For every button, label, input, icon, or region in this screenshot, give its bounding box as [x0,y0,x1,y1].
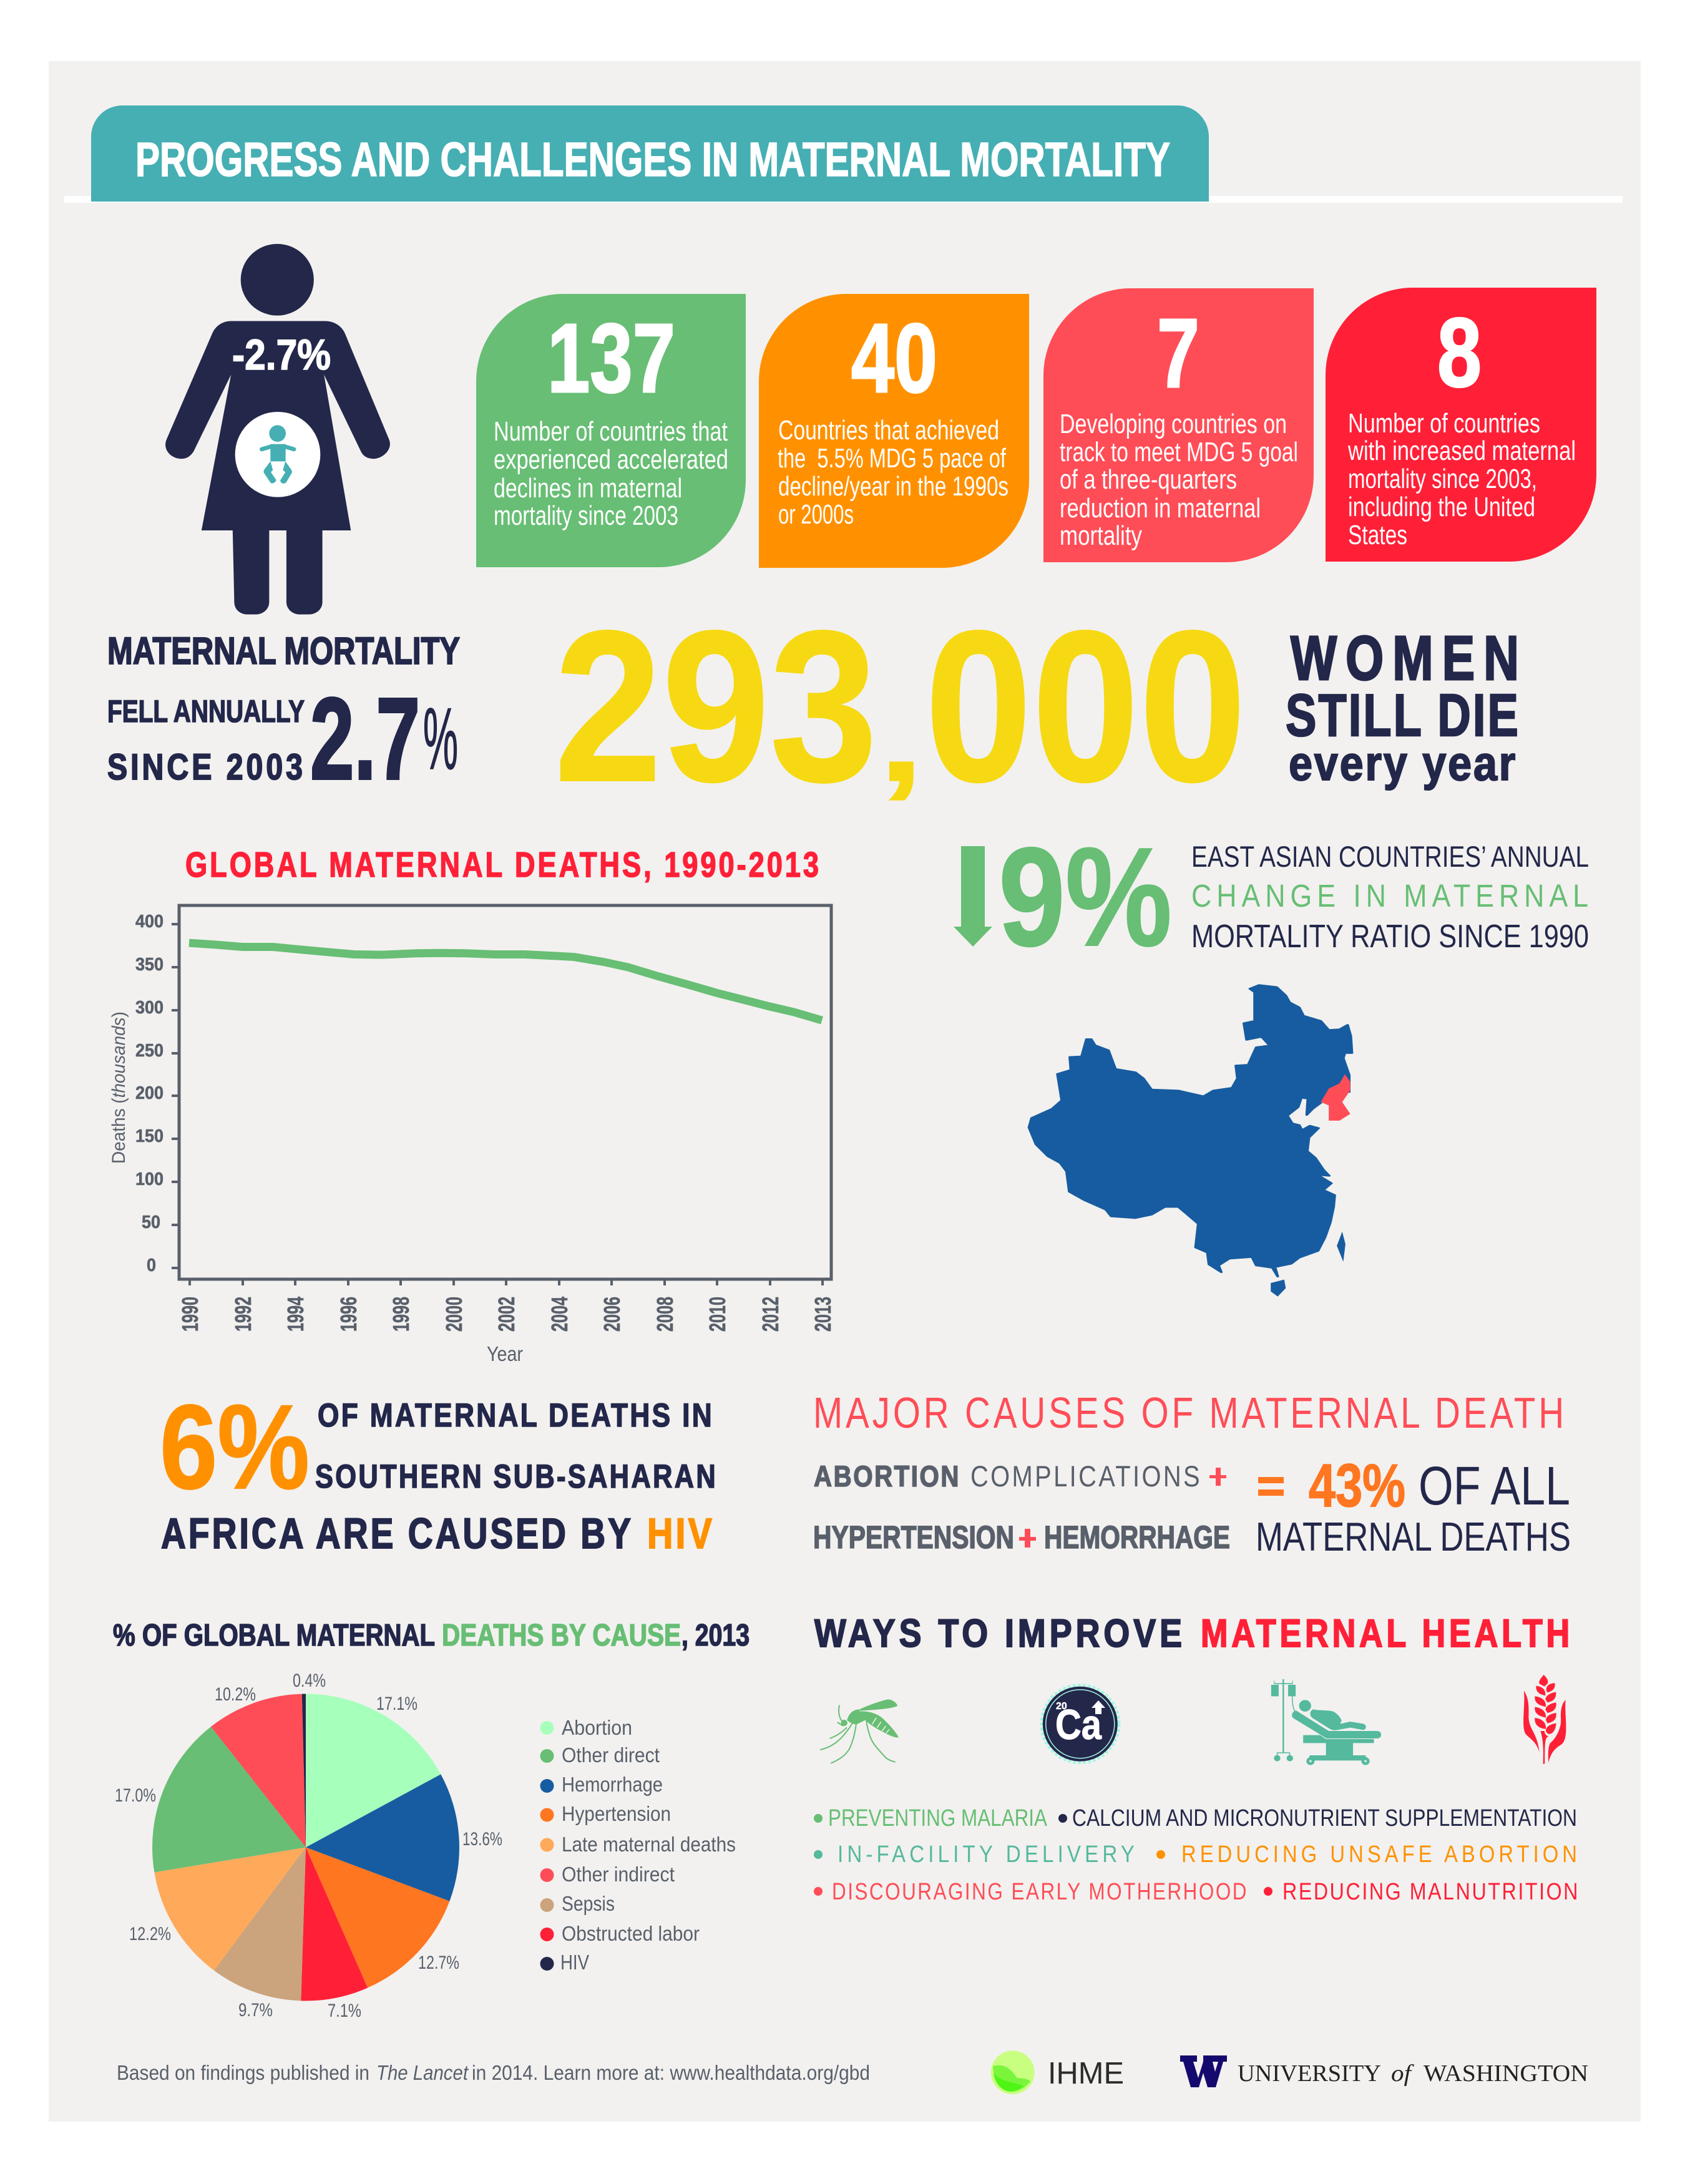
y axis labels: 100 [135,1169,164,1189]
legend: causes: Obstructed labor [562,1922,700,1945]
panel: 137 countries: declines in maternal [494,473,682,504]
icon: hospital bed [1271,1679,1381,1765]
text: % [423,690,458,787]
big number: 293,000 [554,587,1246,827]
text block: maternal mortality fell 2.7% [107,630,460,804]
heading: deaths by cause: DEATHS BY CAUSE [442,1619,681,1652]
x axis labels: 2002 [494,1297,519,1332]
x axis labels: 1990 [177,1297,203,1332]
panel: 40 countries: or 2000s [778,499,854,530]
stat: 6% HIV: OF MATERNAL DEATHS IN [318,1397,714,1434]
pie labels: 12.2% [129,1924,171,1944]
title: PROGRESS AND CHALLENGES IN MATERNAL MORTALITY [135,133,1170,187]
text block: maternal mortality fell 2.7%: MATERNAL MORTALITY [107,630,460,672]
text block: women still die every year: WOMEN [1291,623,1528,693]
pie labels: 17.1% [376,1694,418,1714]
list: ways to improve [814,1805,1581,1905]
list: ways to improve: CALCIUM AND MICRONUTRIENT SUPPLEMENTATION [1072,1805,1577,1831]
pie labels [115,1670,502,2021]
x axis labels: 2000 [441,1297,467,1332]
pie labels: 7.1% [328,2001,361,2021]
text block: east asian countries: CHANGE IN MATERNAL [1191,878,1593,914]
big number: 293,000: , [879,668,924,807]
footer note: Based on findings published in [117,2061,369,2084]
text block: east asian countries: MORTALITY RATIO SINCE 1990 [1191,919,1589,955]
text block: women still die every year [1286,623,1528,791]
x axis labels: 2004 [547,1297,572,1332]
text block: major causes: ABORTION [814,1460,960,1493]
icon: down arrow [954,846,992,947]
axis title: deaths: Deaths (thousands) [109,1012,129,1164]
icon: wheat [1523,1675,1566,1764]
map: china [1029,985,1352,1297]
text block: major causes: 43% [1309,1451,1405,1519]
big number: 293,000: 000 [925,587,1246,827]
text block: major causes: HEMORRHAGE [1044,1519,1230,1555]
stat: 6% HIV: 6% [160,1380,310,1514]
pie labels: 9.7% [238,2000,273,2021]
title banner [91,105,1209,202]
text block: maternal mortality fell 2.7%: 2.7 [310,675,420,804]
logo: university of washington [1180,2055,1588,2087]
line chart: global maternal deaths [109,905,836,1365]
stat: 19%: 9% [999,818,1172,975]
panel: 137 countries: experienced accelerated [494,444,728,475]
panel: 7 countries: mortality [1060,520,1142,551]
logo: IHME [991,2050,1124,2094]
legend: causes: Other direct [562,1743,660,1767]
pie labels: 17.0% [115,1785,156,1806]
legend: causes: Sepsis [562,1892,615,1915]
list: ways to improve: REDUCING UNSAFE ABORTION [1181,1841,1581,1868]
heading: ways to improve: MATERNAL HEALTH [1201,1612,1573,1655]
legend: causes [540,1716,736,1974]
x axis labels [177,1297,836,1332]
icon: calcium [1042,1685,1119,1763]
text block: major causes: HYPERTENSION [813,1519,1014,1555]
heading: ways to improve [814,1612,1573,1655]
icon: calcium: 20 [1056,1701,1067,1712]
text block: maternal mortality fell 2.7%: FELL ANNUALLY [107,694,305,729]
icon: pregnant woman [165,244,390,615]
y axis labels: 50 [142,1212,160,1232]
list: ways to improve: IN-FACILITY DELIVERY [838,1841,1138,1868]
logo: IHME: IHME [1048,2057,1124,2090]
list: ways to improve: REDUCING MALNUTRITION [1282,1879,1580,1905]
legend: causes: HIV [560,1951,589,1974]
x axis labels: 1994 [283,1297,308,1332]
x axis labels: 2013 [810,1297,836,1332]
data line [189,943,822,1020]
y axis labels: 0 [147,1255,156,1275]
y axis labels: 400 [135,912,164,932]
list: ways to improve: DISCOURAGING EARLY MOTHERHOOD [832,1879,1248,1905]
text block: major causes [813,1388,1571,1559]
icon: baby [235,412,320,497]
y axis labels: 200 [135,1083,164,1103]
panel: 7 countries: Developing countries on [1060,409,1287,439]
panel: 7 countries: track to meet MDG 5 goal [1060,437,1298,467]
logo: university of washington: WASHINGTON [1424,2060,1588,2087]
panel: 40 countries: decline/year in the 1990s [778,471,1009,502]
heading: deaths by cause [113,1619,750,1652]
panel: 7 countries: 7 [1157,299,1199,408]
logo: university of washington: of [1391,2060,1414,2087]
stat: 6% HIV: HIV [647,1509,715,1558]
pie labels: 13.6% [462,1829,502,1850]
heading: deaths by cause: % OF GLOBAL MATERNAL [113,1619,435,1652]
stat: 6% HIV: AFRICA ARE CAUSED BY [161,1509,633,1558]
text block: major causes: OF ALL [1419,1456,1570,1516]
text block: major causes: COMPLICATIONS [970,1460,1202,1493]
x axis labels: 1998 [388,1297,414,1332]
percent on torso: -2.7% [232,331,331,379]
y axis labels: 150 [135,1126,164,1146]
legend: causes: Abortion [562,1716,632,1739]
panel: 40 countries: 40 [851,304,937,413]
panel: 8 countries: including the United [1348,492,1535,522]
heading: ways to improve: WAYS TO IMPROVE [814,1612,1186,1655]
panel: 137 countries: Number of countries that [494,416,728,447]
stat: 6% HIV: SOUTHERN SUB-SAHARAN [315,1458,718,1495]
text block: east asian countries [1191,840,1593,955]
legend: causes: Hypertension [562,1802,671,1825]
panel: 137 countries: 137 [547,304,675,413]
text block: east asian countries: EAST ASIAN COUNTRIES’ ANNUAL [1191,840,1589,873]
x axis labels: 2010 [705,1297,730,1332]
y axis labels: 250 [135,1041,164,1061]
legend: causes: Hemorrhage [562,1773,663,1796]
highlighted region [1321,1075,1350,1121]
panel: 7 countries: of a three-quarters [1060,464,1237,495]
footer note: in 2014. Learn more at: www.healthdata.org/gbd [472,2061,870,2084]
pie labels: 12.7% [418,1952,459,1973]
panel: 40 countries: the 5.5% MDG 5 pace of [778,443,1007,474]
panel: 8 countries: 8 [1437,298,1482,407]
legend: causes: Other indirect [562,1863,675,1886]
big number: 293,000: 293 [554,587,877,827]
stat: 19% [954,818,1172,975]
stat: 6% HIV [160,1380,718,1558]
text block: maternal mortality fell 2.7%: SINCE 2003 [107,747,306,787]
panel: 8 countries [1326,288,1596,562]
x axis labels: 2006 [599,1297,625,1332]
axis title: year: Year [487,1342,523,1365]
pie labels: 0.4% [293,1670,326,1691]
pie labels: 10.2% [215,1684,256,1705]
pie chart: deaths by cause [115,1670,502,2021]
panel: 8 countries: with increased maternal [1347,436,1576,466]
footer note: The Lancet [376,2061,469,2084]
icon: mosquito [820,1699,899,1763]
x axis labels: 1992 [230,1297,256,1332]
text block: major causes: MATERNAL DEATHS [1256,1514,1571,1559]
y axis labels: 300 [135,998,164,1018]
footer note [117,2061,870,2084]
list: ways to improve: PREVENTING MALARIA [828,1805,1048,1831]
panel: 7 countries [1043,288,1314,562]
y axis labels: 350 [135,955,164,975]
panel: 8 countries: Number of countries [1348,408,1540,439]
chart title: GLOBAL MATERNAL DEATHS, 1990-2013 [185,845,821,885]
panel: 40 countries [759,294,1029,568]
panel: 137 countries [476,294,746,567]
panel: 7 countries: reduction in maternal [1060,493,1261,524]
x axis labels: 2012 [758,1297,783,1332]
heading: deaths by cause: , 2013 [681,1619,750,1652]
text block: women still die every year: every year [1289,736,1517,791]
panel: 8 countries: mortality since 2003, [1348,464,1537,494]
icon: calcium: Ca [1055,1701,1102,1748]
panel: 40 countries: Countries that achieved [778,415,999,446]
x axis labels: 1996 [336,1297,361,1332]
x axis labels: 2008 [652,1297,678,1332]
logo: university of washington: UNIVERSITY [1238,2060,1381,2087]
y axis labels [135,912,164,1275]
panel: 137 countries: mortality since 2003 [494,500,678,531]
panel: 8 countries: States [1348,520,1407,550]
legend: causes: Late maternal deaths [562,1833,736,1856]
text block: women still die every year: STILL DIE [1286,682,1520,749]
